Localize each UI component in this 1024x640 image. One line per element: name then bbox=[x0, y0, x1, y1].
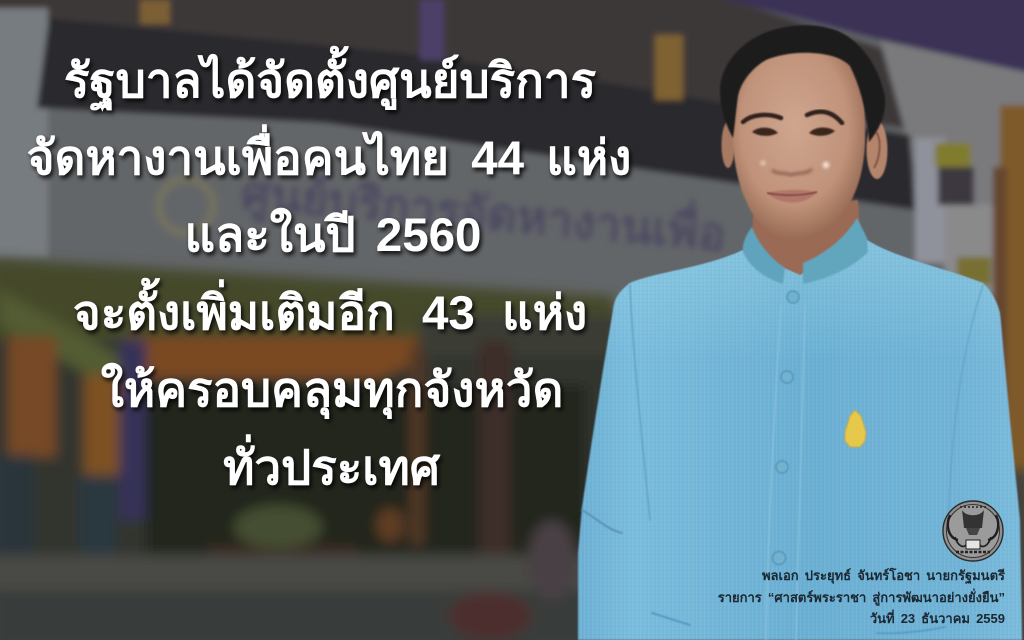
background: blurred building photo, lower part bbox=[0, 258, 1024, 640]
heading text: รัฐบาลได้จัดตั้งศูนย์บริการ bbox=[64, 45, 597, 112]
heading text: ทั่วประเทศ bbox=[223, 434, 441, 495]
emblem: government seal bbox=[943, 501, 1003, 561]
collar bbox=[743, 218, 868, 284]
neck bbox=[752, 200, 860, 290]
blurred sign lettering: ศูนย์บริการจัดหางานเพื่อ bbox=[239, 160, 729, 263]
mouth bbox=[767, 190, 817, 203]
heading text: และในปี 2560 bbox=[185, 207, 481, 262]
eyes bbox=[752, 127, 835, 136]
jacket seams and folds bbox=[582, 285, 983, 640]
face bbox=[732, 44, 865, 239]
caption: source and date: วันที่ 23 ธันวาคม 2559 bbox=[870, 609, 1005, 626]
jacket highlight bbox=[578, 240, 1022, 640]
hair bbox=[720, 25, 885, 142]
eyebrows bbox=[743, 112, 842, 123]
jacket body bbox=[578, 240, 1022, 640]
heading text: จะตั้งเพิ่มเติมอีก 43 แห่ง bbox=[73, 277, 587, 340]
heading text: ให้ครอบคลุมทุกจังหวัด bbox=[101, 362, 563, 419]
ears bbox=[722, 121, 888, 179]
heading text: จัดหางานเพื่อคนไทย 44 แห่ง bbox=[27, 124, 631, 185]
person: portrait illustration bbox=[578, 25, 1022, 640]
caption: source and date bbox=[718, 567, 1005, 626]
gold pin bbox=[845, 410, 866, 447]
heading text bbox=[27, 45, 631, 495]
caption: source and date: รายการ “ศาสตร์พระราชา สู่การพัฒนาอย่างยั่งยืน” bbox=[718, 588, 1005, 606]
jacket weave bbox=[578, 240, 1022, 640]
caption: source and date: พลเอก ประยุทธ์ จันทร์โอชา นายกรัฐมนตรี bbox=[762, 567, 1005, 585]
buttons bbox=[772, 291, 799, 564]
nose bbox=[760, 160, 829, 175]
